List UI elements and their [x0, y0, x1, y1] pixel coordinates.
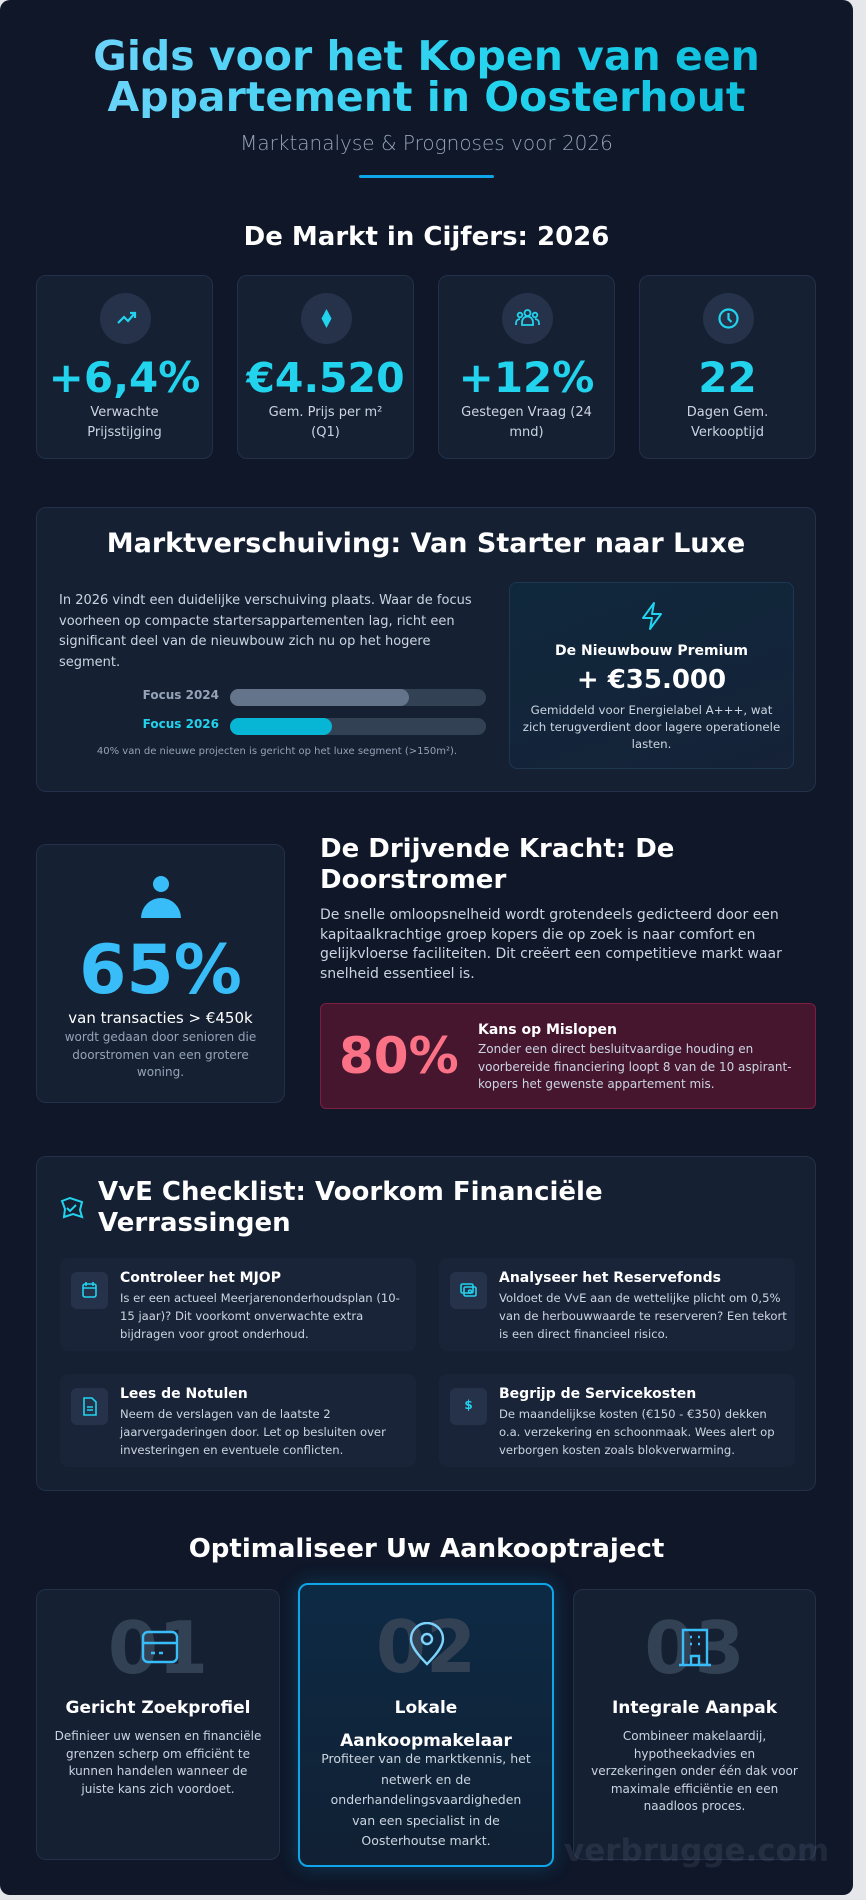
item: reserve fund: Voldoet de VvE aan de wettelijke plicht om 0,5% van de herbouwwaarde te reserveren? Een tekort is een direct financieel risico. — [499, 1291, 787, 1341]
item: reserve fund — [439, 1258, 795, 1351]
icon: badge — [60, 1197, 84, 1218]
text block: In 2026 vindt een duidelijke verschuiving plaats. Waar de focus voorheen op compacte startersappartementen lag, richt een significant deel van de nieuwbouw zich nu op het hogere segment. — [59, 593, 472, 670]
title: Appartement in Oosterhout — [107, 73, 746, 121]
step card 2 (highlighted): 02 — [376, 1605, 476, 1689]
icon: person — [141, 876, 181, 918]
step card 1 — [36, 1589, 280, 1860]
icon: clock — [703, 293, 754, 344]
item: service costs: Begrijp de Servicekosten — [499, 1386, 696, 1402]
panel: VvE checklist — [36, 1156, 816, 1491]
icon: bolt — [642, 602, 662, 630]
step card 2 (highlighted): Oosterhoutse markt. — [361, 1833, 491, 1848]
step card 1: kunnen handelen wanneer de — [69, 1764, 247, 1778]
callout: 80% risk: 80% — [339, 1027, 459, 1085]
stat card: price increase: Prijsstijging — [87, 425, 162, 440]
stat card: demand — [438, 275, 615, 459]
step card 3: hypotheekadvies en — [634, 1746, 755, 1760]
step card 2 (highlighted): Lokale — [395, 1698, 457, 1718]
step card 3: 03 — [644, 1606, 745, 1690]
step card 2 (highlighted) — [298, 1583, 554, 1867]
icon: card — [142, 1630, 178, 1664]
watermark: verbrugge.com — [564, 1833, 829, 1869]
heading: driving force — [320, 834, 674, 895]
step card 2 (highlighted): onderhandelingsvaardigheden — [331, 1792, 521, 1807]
panel: market shift: 40% van de nieuwe projecten is gericht op het luxe segment (>150m²). — [97, 746, 457, 757]
icon: map pin — [410, 1622, 444, 1666]
step card 1: 01 — [108, 1606, 208, 1690]
callout: new build premium: + €35.000 — [577, 665, 726, 695]
item: MJOP — [60, 1258, 416, 1351]
callout: new build premium: De Nieuwbouw Premium — [555, 643, 748, 659]
step card 3: Combineer makelaardij, — [623, 1729, 766, 1743]
title: Gids voor het Kopen van een — [93, 32, 760, 80]
item: MJOP: Controleer het MJOP — [120, 1270, 281, 1286]
panel: 65% stat: 65% — [79, 931, 242, 1010]
step card 3: maximale efficiëntie en een — [611, 1782, 778, 1796]
step card 2 (highlighted): Profiteer van de marktkennis, het — [321, 1751, 531, 1766]
stat card: price per m2: (Q1) — [311, 425, 340, 440]
heading: VvE Checklist: Voorkom Financiële — [98, 1177, 603, 1207]
step card 3 — [573, 1589, 816, 1860]
item: service costs: $ — [464, 1398, 473, 1412]
stat card: days: 22 — [698, 353, 757, 402]
callout: 80% risk: Kans op Mislopen — [478, 1022, 617, 1038]
stat card: price increase — [36, 275, 213, 459]
stat card: days: Dagen Gem. — [687, 405, 768, 420]
stat card: price increase: +6,4% — [49, 353, 200, 402]
stat card: days: Verkooptijd — [691, 425, 764, 440]
item: service costs: De maandelijkse kosten (€150 - €350) dekken o.a. verzekering en schoonmaak. Wees alert op verborgen kosten zoals blokverwarming. — [499, 1407, 775, 1457]
step card 1: grenzen scherp om efficiënt te — [66, 1746, 250, 1760]
subtitle: Marktanalyse & Prognoses voor 2026 — [240, 131, 613, 155]
bar chart: Focus 2024 — [143, 688, 219, 702]
heading: optimise: Optimaliseer Uw Aankooptraject — [189, 1534, 664, 1564]
bar chart — [143, 688, 486, 735]
stat card: price per m2: Gem. Prijs per m² — [269, 405, 382, 420]
step card 3: naadloos proces. — [644, 1799, 745, 1813]
stat card: price per m2: €4.520 — [246, 354, 405, 402]
panel: market shift — [36, 507, 816, 792]
callout: new build premium: Gemiddeld voor Energielabel A+++, wat zich terugverdient door lagere operationele lasten. — [523, 703, 780, 751]
stat card: demand: Gestegen Vraag (24 — [461, 405, 592, 420]
icon: building — [679, 1628, 711, 1666]
heading: Verrassingen — [98, 1208, 291, 1238]
heading: driving force: De Drijvende Kracht: De — [320, 834, 674, 864]
item: minutes: Lees de Notulen — [120, 1386, 248, 1402]
step card 2 (highlighted): Aankoopmakelaar — [340, 1731, 512, 1751]
icon: trend — [100, 293, 151, 344]
panel: 65% stat — [36, 844, 285, 1103]
step card 2 (highlighted): van een specialist in de — [352, 1812, 500, 1828]
stat card: demand: mnd) — [509, 425, 544, 440]
title — [0, 36, 853, 118]
heading — [98, 1177, 603, 1238]
step card 2 (highlighted): netwerk en de — [381, 1772, 471, 1786]
heading: market numbers: De Markt in Cijfers: 2026 — [244, 222, 609, 252]
heading: Marktverschuiving: Van Starter naar Luxe — [107, 528, 745, 559]
callout: new build premium — [509, 582, 794, 769]
panel: 65% stat: wordt gedaan door senioren die doorstromen van een grotere woning. — [65, 1030, 256, 1079]
step card 1: juiste kans zich voordoet. — [81, 1782, 235, 1796]
step card 1: Gericht Zoekprofiel — [66, 1698, 250, 1718]
icon: people — [502, 293, 553, 344]
item: minutes: Neem de verslagen van de laatste 2 jaarvergaderingen door. Let op besluiten over investeringen en eventuele conflicten. — [120, 1407, 386, 1457]
stat card: price per m2 — [237, 275, 414, 459]
heading: driving force: Doorstromer — [320, 865, 506, 895]
icon: diamond — [301, 293, 352, 344]
text block: De snelle omloopsnelheid wordt grotendeels gedicteerd door een kapitaalkrachtige groep kopers die op zoek is naar comfort en gelijkvloerse faciliteiten. Dit creëert een competitieve markt waar snelheid essentieel is. — [320, 907, 782, 982]
step card 3: verzekeringen onder één dak voor — [591, 1764, 798, 1778]
stat card: demand: +12% — [459, 353, 594, 402]
panel: 65% stat: van transacties > €450k — [68, 1009, 253, 1027]
callout: 80% risk — [320, 1003, 816, 1109]
item: reserve fund: Analyseer het Reservefonds — [499, 1270, 721, 1286]
step card 3: Integrale Aanpak — [612, 1698, 777, 1718]
bar chart: Focus 2026 — [143, 717, 219, 731]
item: MJOP: Is er een actueel Meerjarenonderhoudsplan (10-15 jaar)? Dit voorkomt onverwachte extra bijdragen voor groot onderhoud. — [120, 1291, 400, 1341]
item: minutes — [60, 1374, 416, 1467]
item: service costs — [439, 1374, 795, 1467]
stat card: days — [639, 275, 816, 459]
stat card: price increase: Verwachte — [90, 405, 159, 420]
callout: 80% risk: Zonder een direct besluitvaardige houding en voorbereide financiering loopt 8 van de 10 aspirant-kopers het gewenste appartement mis. — [478, 1042, 792, 1091]
step card 1: Definieer uw wensen en financiële — [55, 1729, 261, 1743]
